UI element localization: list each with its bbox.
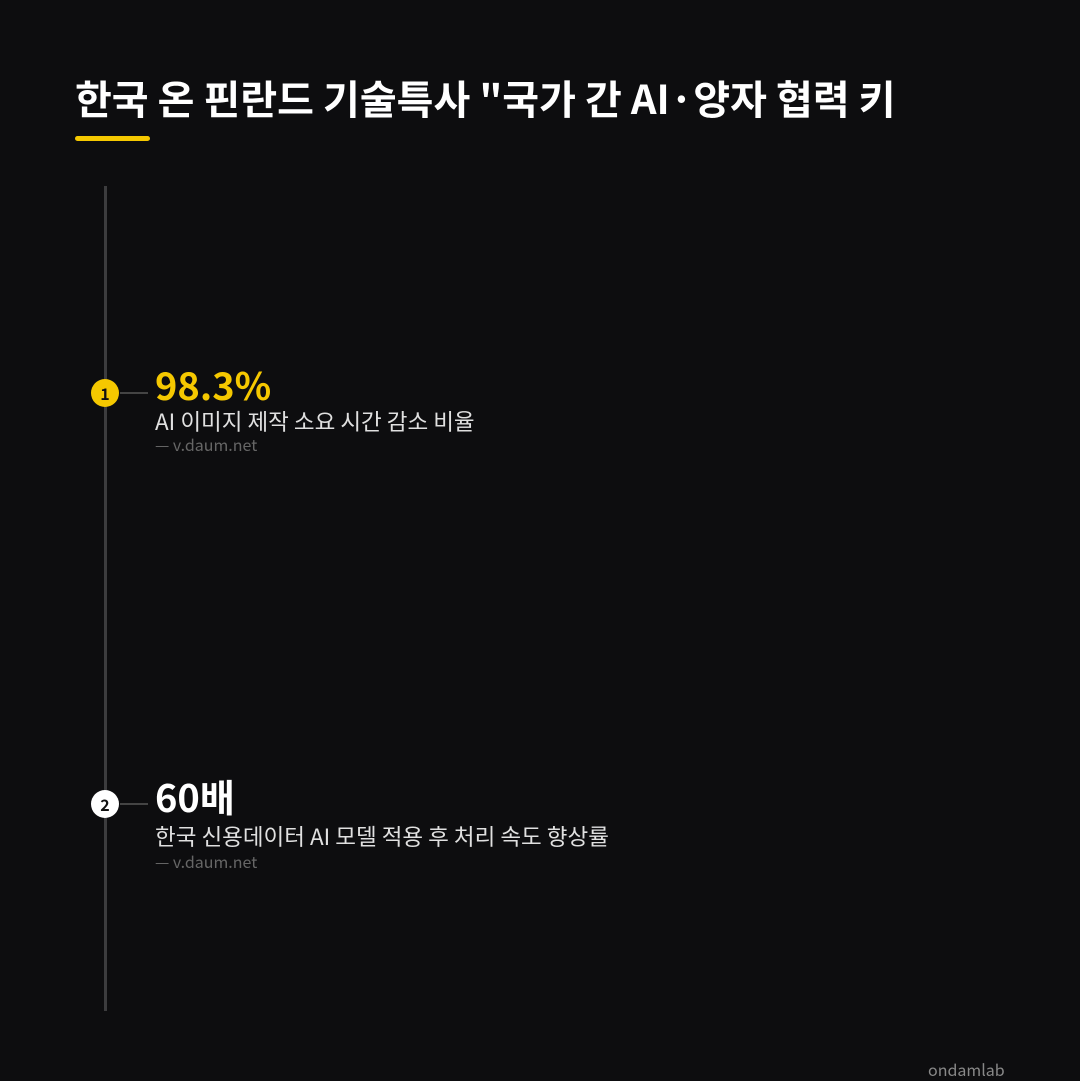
source: — v.daum.net — [155, 432, 257, 456]
marker 1 — [91, 379, 119, 407]
item 1 — [91, 356, 475, 456]
marker 2: 2 — [100, 792, 110, 816]
item 2 — [91, 768, 609, 873]
connector — [120, 392, 148, 394]
label: 한국 신용데이터 AI 모델 적용 후 처리 속도 향상률 — [155, 820, 609, 852]
value: 98.3% — [155, 356, 271, 411]
footer brand: ondamlab — [928, 1057, 1005, 1081]
connector — [120, 803, 148, 805]
source: — v.daum.net — [155, 849, 257, 873]
title underline — [75, 136, 150, 141]
marker 1: 1 — [100, 381, 110, 405]
timeline line — [104, 186, 107, 1011]
title: 한국 온 핀란드 기술특사 "국가 간 AI·양자 협력 키 — [75, 68, 896, 126]
label: AI 이미지 제작 소요 시간 감소 비율 — [155, 405, 475, 437]
value: 60배 — [155, 768, 235, 823]
marker 2 — [91, 790, 119, 818]
